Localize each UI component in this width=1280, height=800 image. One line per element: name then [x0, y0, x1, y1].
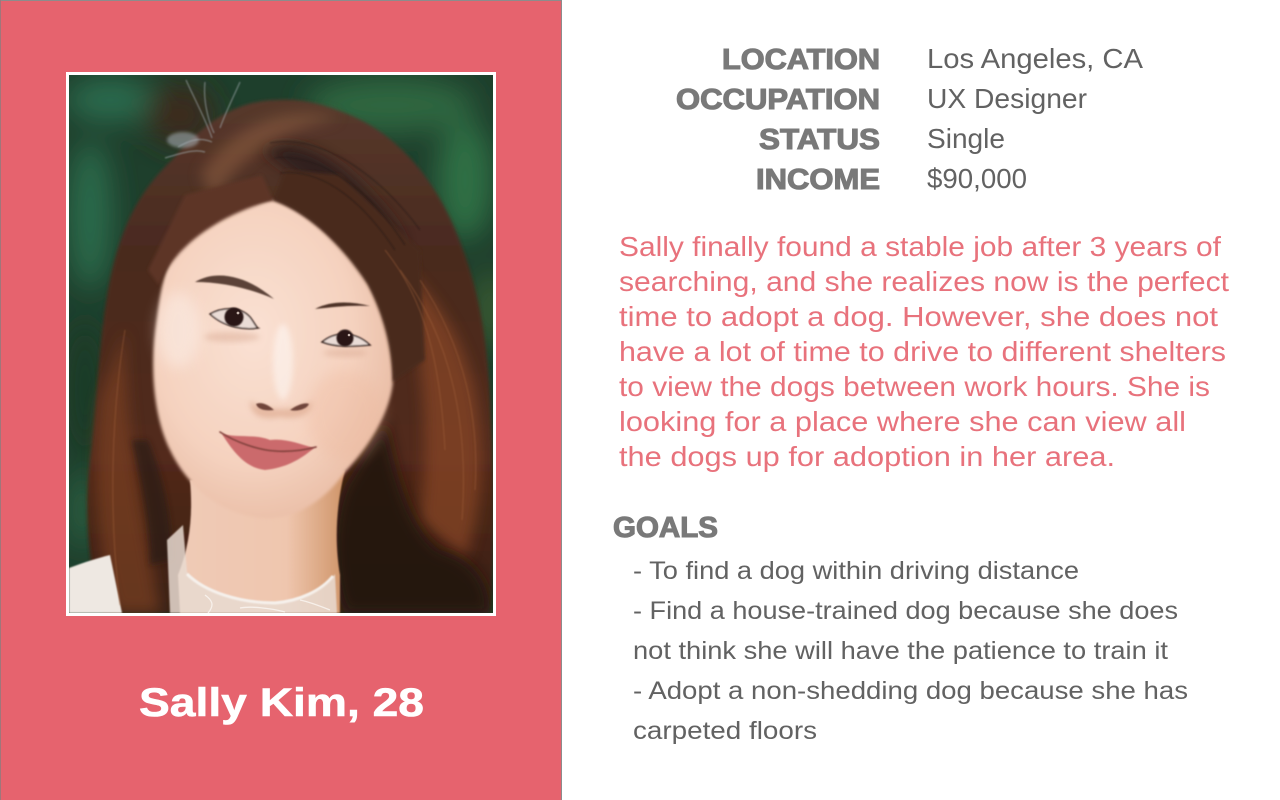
goals list: - To find a dog within driving distance	[633, 557, 1079, 585]
name: Sally Kim, 28	[139, 681, 424, 725]
hair	[87, 100, 494, 613]
value: status: Single	[927, 123, 1005, 154]
bio text block: time to adopt a dog. However, she does not	[619, 301, 1218, 332]
goals list: carpeted floors	[633, 717, 817, 745]
highlights	[156, 292, 200, 368]
face	[153, 200, 393, 518]
panel: details	[676, 43, 1143, 196]
blouse	[69, 555, 122, 613]
goals list	[633, 557, 1188, 745]
bio text block: the dogs up for adoption in her area.	[619, 441, 1115, 472]
eyes	[210, 309, 258, 329]
strand overlay	[113, 250, 476, 605]
flyaway hairs	[165, 80, 240, 158]
neck	[178, 470, 345, 613]
bio text block	[619, 231, 1229, 472]
label: occupation: OCCUPATION	[676, 84, 880, 116]
nose	[250, 400, 312, 418]
label: income: INCOME	[756, 164, 880, 196]
hair sweep across forehead	[273, 170, 425, 382]
portrait photo	[65, 75, 499, 613]
bio text block: looking for a place where she can view all	[619, 406, 1186, 437]
photo frame	[66, 72, 496, 616]
panel: profile	[0, 0, 562, 800]
goals list: not think she will have the patience to train it	[633, 637, 1168, 665]
bio text block: have a lot of time to drive to different shelters	[619, 336, 1226, 367]
label: status: STATUS	[759, 124, 880, 156]
goals list: - Adopt a non-shedding dog because she has	[633, 677, 1188, 705]
bio text block: Sally finally found a stable job after 3 years of	[619, 231, 1221, 262]
eyebrows	[195, 275, 274, 299]
value: occupation: UX Designer	[927, 83, 1087, 114]
value: location: Los Angeles, CA	[927, 43, 1143, 74]
bio text block: searching, and she realizes now is the perfect	[619, 266, 1229, 297]
hair shading	[96, 330, 160, 613]
bio text block: to view the dogs between work hours. She is	[619, 371, 1210, 402]
value: income: $90,000	[927, 163, 1027, 194]
goals list: - Find a house-trained dog because she does	[633, 597, 1178, 625]
label: location: LOCATION	[722, 44, 880, 76]
goals heading: GOALS	[613, 512, 718, 544]
lips	[222, 434, 314, 470]
